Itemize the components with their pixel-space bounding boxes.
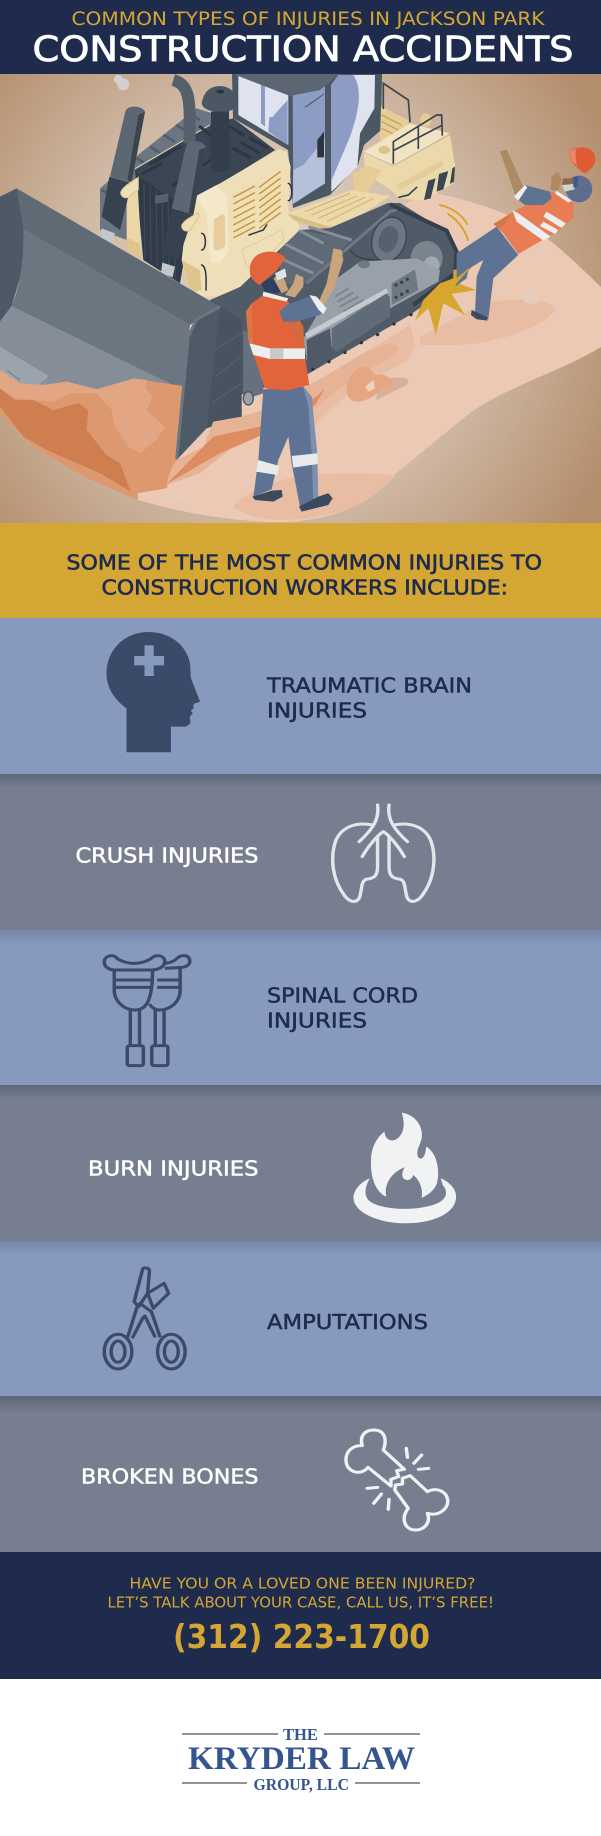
icon: lungs <box>333 805 434 901</box>
logo: The Kryder Law Group <box>0 1679 601 1836</box>
call to action band <box>0 1552 601 1679</box>
right track assembly <box>210 203 458 405</box>
logo wordmark: THE <box>283 1725 318 1744</box>
rear track <box>100 108 233 240</box>
falling hard hat <box>568 147 595 173</box>
worker in foreground <box>246 248 343 512</box>
panel: traumatic brain injuries <box>0 618 601 774</box>
rear engine box <box>353 83 455 205</box>
gold heading band <box>0 523 601 618</box>
left post <box>127 178 142 260</box>
panel: spinal cord injuries: INJURIES <box>267 1008 367 1032</box>
ground shadows <box>233 300 555 520</box>
call to action band: LET’S TALK ABOUT YOUR CASE, CALL US, IT’S FREE! <box>108 1594 494 1612</box>
cab deck <box>287 190 390 231</box>
logo: The Kryder Law Group: GROUP, LLC <box>254 1775 349 1794</box>
worker being struck <box>455 147 595 321</box>
louvers <box>233 171 281 238</box>
impact burst <box>415 265 476 335</box>
bulldozer <box>100 74 455 297</box>
label: SPINAL CORD <box>267 984 418 1008</box>
phone number: (312) 223-1700 <box>173 1617 430 1656</box>
head and hard hat <box>263 292 288 302</box>
panel: spinal cord injuries <box>0 930 601 1085</box>
illustration: bulldozer accident scene <box>0 74 601 524</box>
exhaust and air cleaner <box>173 80 238 172</box>
ground patch <box>137 192 601 522</box>
safety vest <box>246 295 309 391</box>
label: AMPUTATIONS <box>267 1310 428 1334</box>
panel: burn injuries <box>0 1085 601 1241</box>
label: BROKEN BONES <box>81 1464 258 1488</box>
icon: flame <box>353 1113 456 1223</box>
cab frame and windows <box>232 74 382 208</box>
trousers <box>253 387 318 507</box>
blade side plate <box>177 307 242 460</box>
logo: The Kryder Law Group: KRYDER LAW <box>188 1741 415 1777</box>
pebbles <box>169 293 540 501</box>
header subtitle: COMMON TYPES OF INJURIES IN JACKSON PARK <box>72 9 545 30</box>
gold heading band: CONSTRUCTION WORKERS INCLUDE: <box>102 576 508 600</box>
hydraulic cylinders <box>100 107 206 277</box>
smoke puff <box>114 75 129 90</box>
arms <box>500 149 523 195</box>
call to action text: HAVE YOU OR A LOVED ONE BEEN INJURED? <box>130 1574 476 1592</box>
icon: surgical scissors <box>104 1268 185 1369</box>
engine housing <box>127 118 275 283</box>
radiator grille <box>144 183 175 278</box>
icon: broken bone <box>346 1430 448 1530</box>
icon: head with medical cross <box>107 632 200 752</box>
label: TRAUMATIC BRAIN <box>266 674 472 698</box>
heading text: SOME OF THE MOST COMMON INJURIES TO <box>66 550 542 574</box>
label: BURN INJURIES <box>88 1156 258 1180</box>
sand pile <box>0 370 183 500</box>
panel: traumatic brain injuries: INJURIES <box>267 698 367 722</box>
boots <box>252 490 333 512</box>
head <box>566 176 592 202</box>
panel: broken bones <box>0 1396 601 1552</box>
label: CRUSH INJURIES <box>76 844 258 868</box>
motion arcs <box>440 205 468 240</box>
panel: amputations <box>0 1241 601 1396</box>
engine body <box>182 149 300 297</box>
transmission block <box>243 258 443 405</box>
header band <box>0 0 601 74</box>
arms <box>317 248 343 307</box>
panel: crush injuries <box>0 774 601 930</box>
icon: crutches <box>104 956 190 1066</box>
rock <box>347 367 409 402</box>
trousers <box>457 227 518 319</box>
blade <box>0 188 220 400</box>
safety vest <box>493 192 574 254</box>
header title: CONSTRUCTION ACCIDENTS <box>32 30 574 70</box>
scene background <box>0 74 601 524</box>
front sand <box>167 343 400 485</box>
handles <box>202 183 292 290</box>
